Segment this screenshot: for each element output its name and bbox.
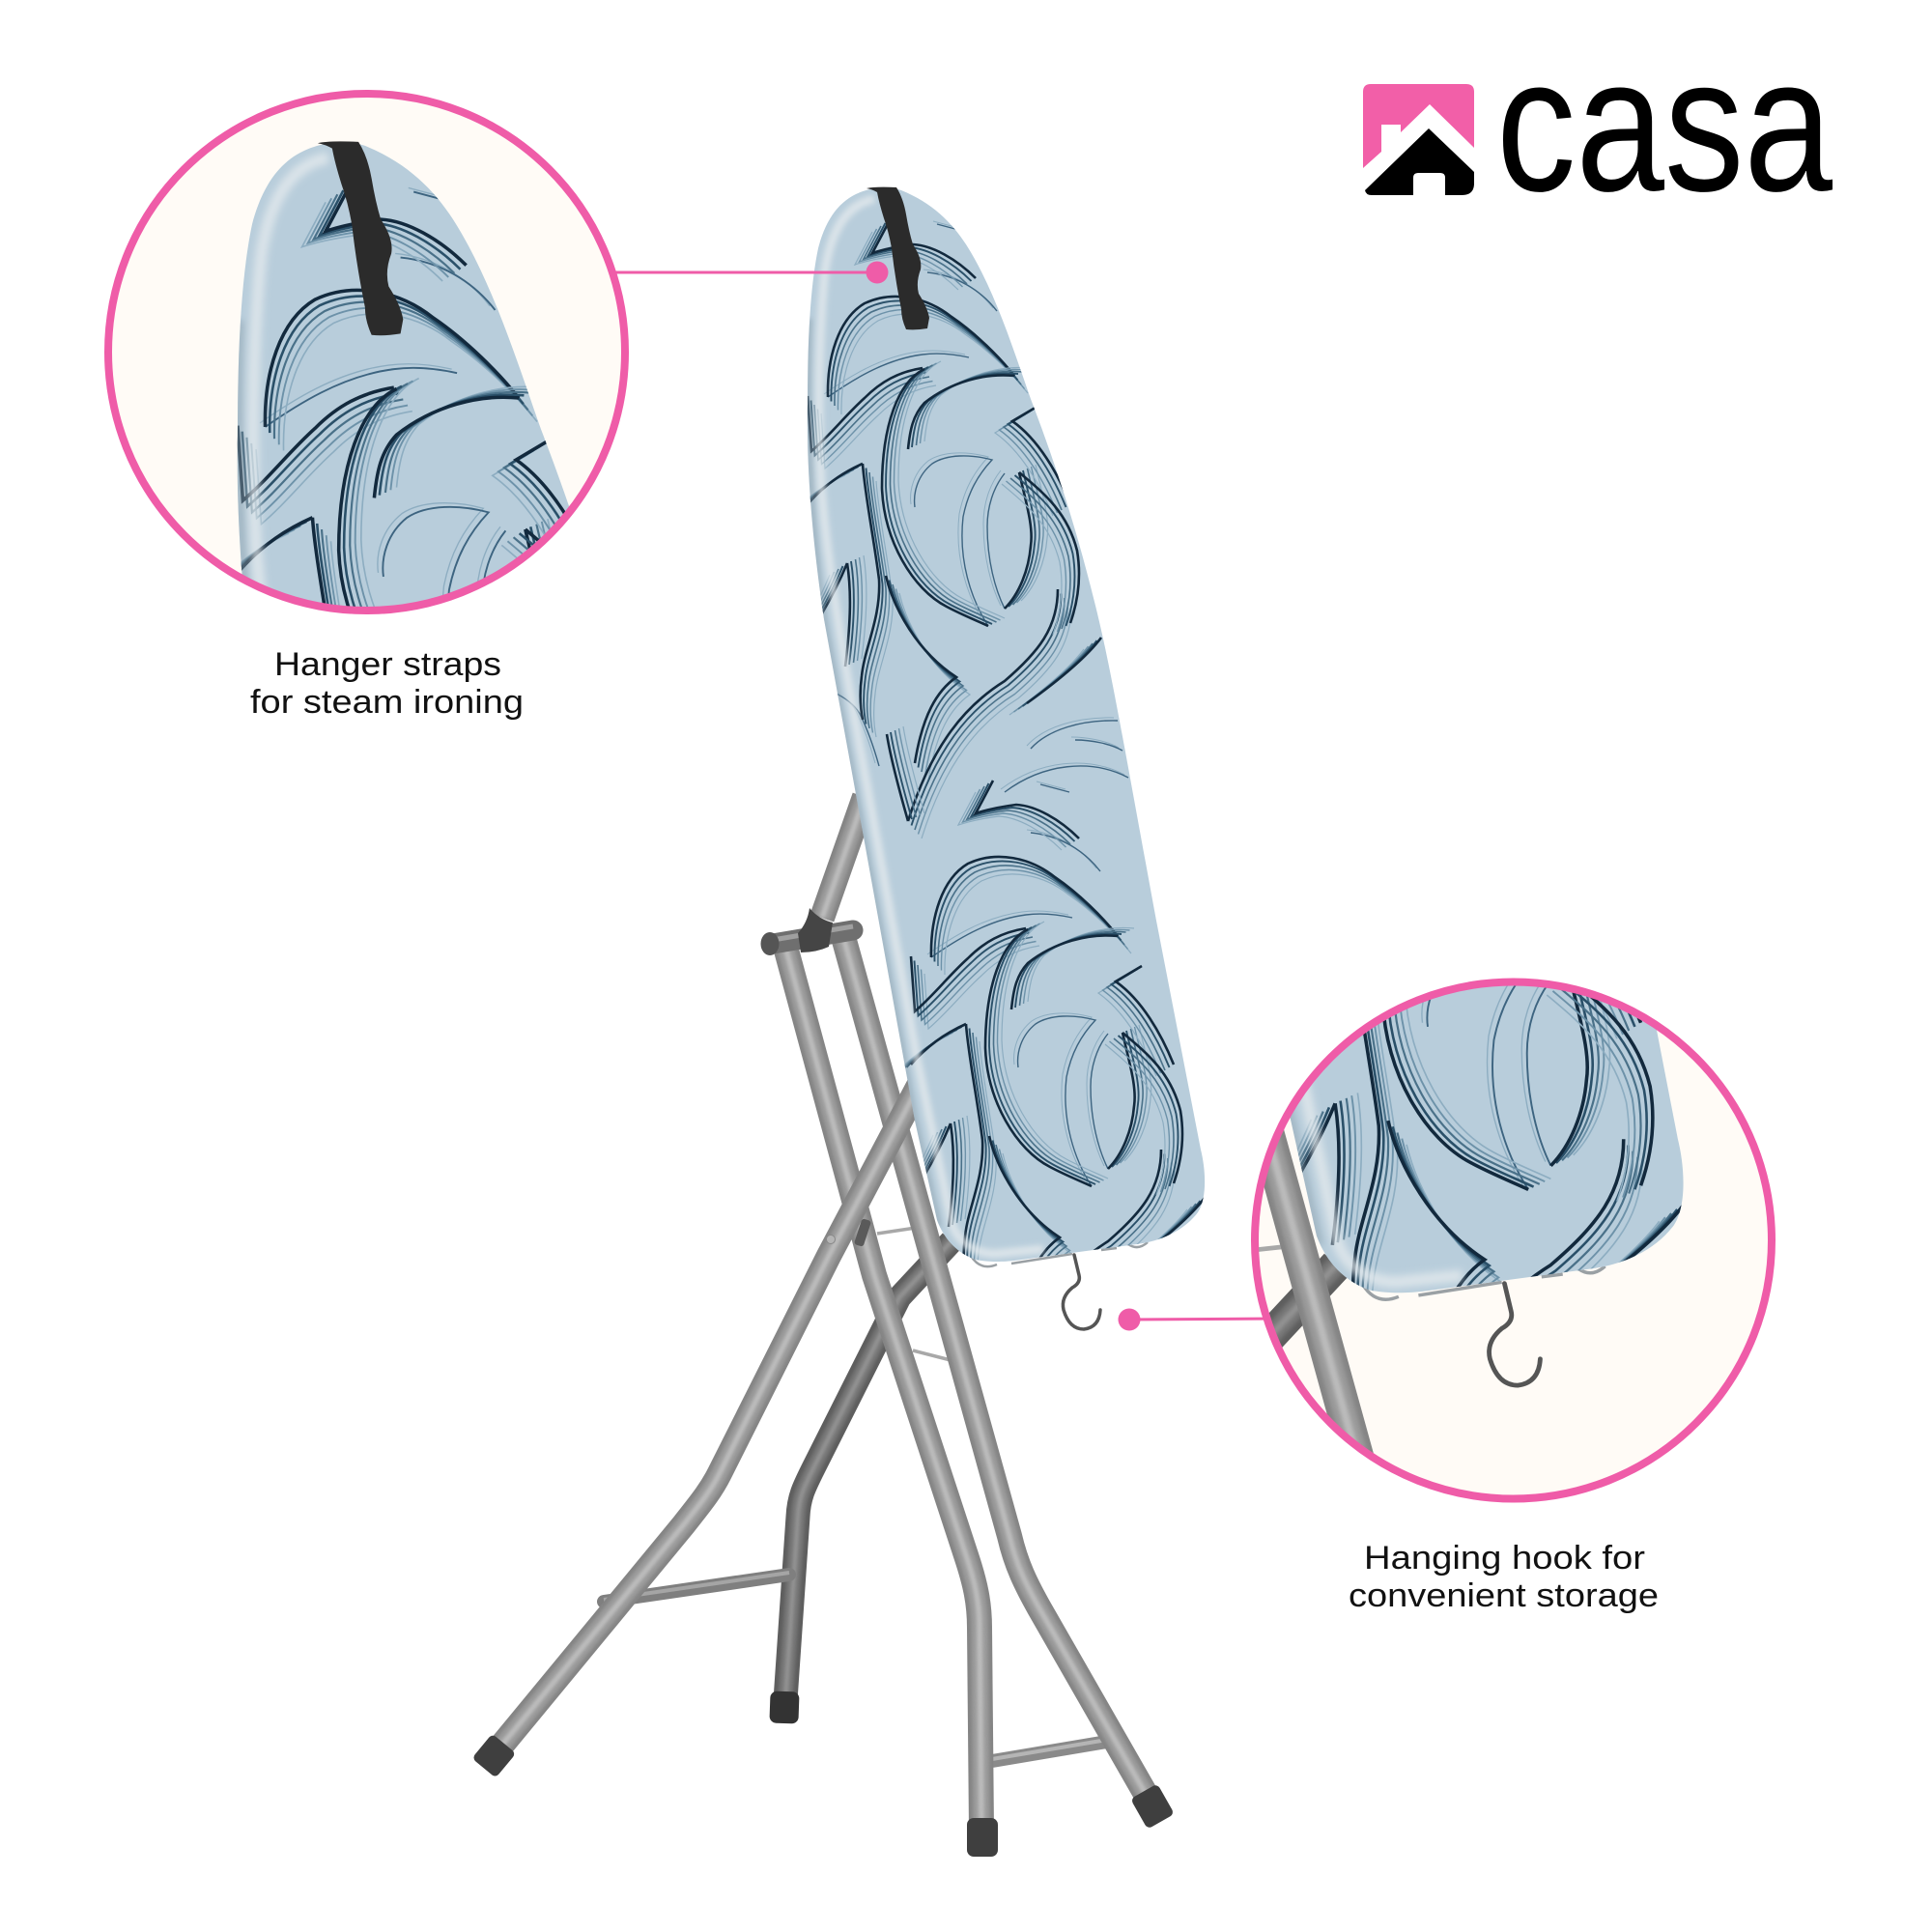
lower left crossbar [604,1573,789,1602]
connector line [609,270,877,274]
board surface [808,187,1205,1262]
front centre leg [785,947,981,1831]
long diagonal leg [497,1084,920,1750]
hanging hook [1063,1255,1100,1329]
connector line [1129,1319,1275,1320]
top crossbar [761,926,853,955]
foot: centre [967,1818,998,1857]
zoom circle background [1256,982,1772,1498]
ironing board cover [790,187,1232,1399]
hanger strap [867,187,929,329]
right rear leg [843,937,1150,1801]
logo wordmark: casa [1496,17,1833,231]
hook and wire frame [971,1242,1148,1329]
caption: convenient storage [1349,1577,1659,1614]
callout: hanging hook [1119,978,1776,1613]
upper support tube [822,797,865,918]
edge highlight [809,199,1043,1254]
connector dot [1119,1308,1140,1331]
back leg [785,1241,952,1700]
enlarged hook [1363,1266,1605,1385]
connector dot [866,261,889,284]
enlarged board [1291,985,1684,1293]
logo icon: pink square and house [1363,84,1474,195]
enlarged board top [238,141,569,607]
swirl pattern [790,220,1232,1399]
lower right crossbar [992,1740,1107,1761]
ironing board product [471,187,1232,1857]
foot: back [769,1690,800,1724]
rods [877,1228,951,1360]
caption: Hanging hook for [1364,1540,1645,1577]
callout: hanger straps [104,90,889,720]
foot: right [1130,1783,1175,1830]
stand: tubular steel legs [471,797,1175,1857]
pivot bolt and bracket [827,1218,871,1247]
caption [250,646,524,721]
enlarged board end with hook [1259,985,1684,1453]
circle ring [1255,981,1772,1499]
zoom circle background [108,95,624,611]
wire frame under board [971,1242,1148,1266]
circle ring [108,94,625,611]
logo: casa [1363,17,1833,231]
black connector [798,908,833,952]
caption: for steam ironing [250,684,524,721]
cropped stand [1259,1130,1374,1453]
foot: left [471,1734,516,1778]
caption: Hanger straps [274,646,501,683]
caption [1349,1540,1659,1614]
